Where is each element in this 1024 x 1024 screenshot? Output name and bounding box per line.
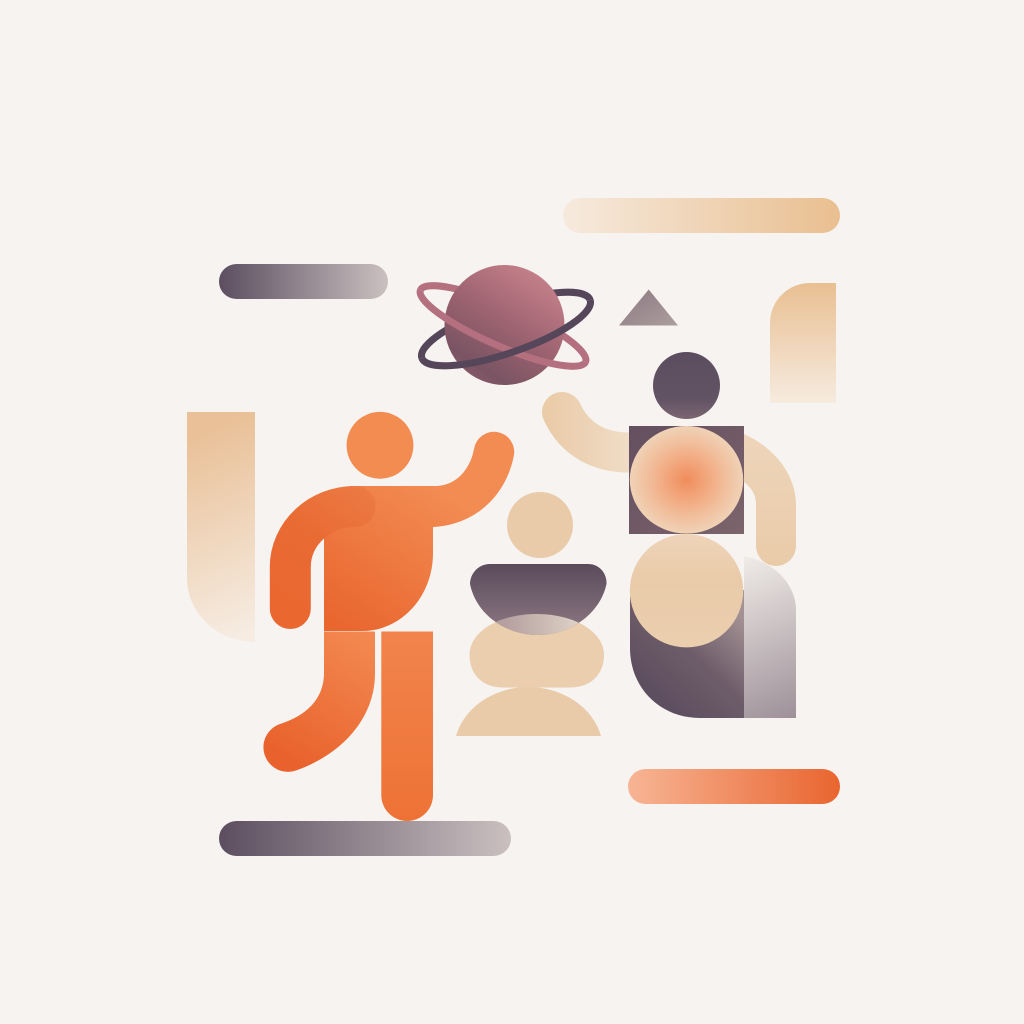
square chest	[629, 426, 744, 534]
front leg	[381, 632, 433, 821]
head	[347, 412, 413, 479]
ring front dark	[422, 300, 598, 381]
head	[507, 492, 573, 558]
bottom dark bar	[219, 821, 511, 856]
right figure	[562, 352, 796, 718]
tan shape left	[187, 412, 255, 642]
tan arch upper right	[770, 283, 836, 403]
abstract geometric illustration	[187, 198, 840, 856]
overlap lens	[496, 614, 579, 635]
ring front rose	[412, 290, 586, 380]
right arm	[744, 434, 796, 566]
glowing circle	[630, 426, 743, 534]
belly circle	[630, 534, 743, 647]
pill body	[470, 614, 604, 688]
top tan bar	[563, 198, 840, 233]
seated figure center	[456, 492, 607, 736]
planet sphere	[444, 265, 564, 385]
bowl	[470, 564, 607, 635]
ring back dark	[414, 277, 590, 358]
rear leg	[263, 632, 375, 772]
orange figure	[263, 412, 514, 821]
base dark block	[630, 590, 744, 718]
orange bar	[628, 769, 840, 804]
base dome	[456, 687, 601, 736]
head	[653, 352, 720, 419]
rear arm	[290, 506, 355, 608]
torso	[324, 432, 514, 631]
left raised arm	[562, 412, 629, 452]
planet with rings	[412, 265, 598, 385]
triangle	[619, 290, 678, 326]
base grey arch	[744, 556, 796, 718]
dark bar upper left	[219, 264, 388, 299]
ring back rose	[420, 272, 594, 362]
